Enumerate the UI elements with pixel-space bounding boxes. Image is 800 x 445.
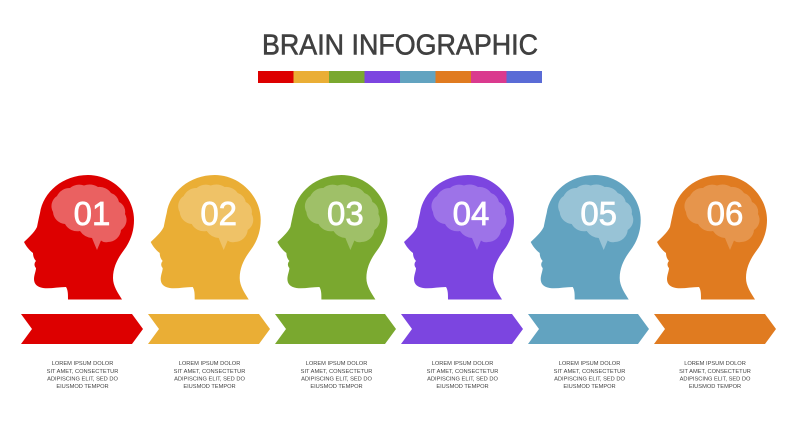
number 02: 02 (200, 195, 237, 232)
panel: step 04 (401, 175, 523, 390)
head icon 02 (151, 175, 261, 300)
arrow 04 (401, 314, 523, 344)
arrow 06 (654, 314, 776, 344)
head icon 01 (24, 175, 134, 300)
text 03: EIUSMOD TEMPOR (310, 384, 363, 390)
arrow 03 (275, 314, 396, 344)
head icon 04 (404, 175, 514, 300)
text 03: SIT AMET, CONSECTETUR (301, 369, 372, 375)
number 05: 05 (580, 195, 617, 232)
text 01: SIT AMET, CONSECTETUR (47, 369, 118, 375)
head icon 03 (277, 175, 387, 300)
text 06: LOREM IPSUM DOLOR (684, 361, 746, 367)
title: BRAIN INFOGRAPHIC (262, 30, 538, 62)
panel: step 02 (148, 175, 270, 390)
number 04: 04 (453, 195, 489, 232)
text 04: SIT AMET, CONSECTETUR (427, 369, 498, 375)
text 06: SIT AMET, CONSECTETUR (679, 369, 751, 375)
panel: step 06 (654, 175, 776, 390)
text 03: ADIPISCING ELIT, SED DO (301, 376, 372, 382)
panel: step 01 (21, 175, 143, 390)
text 02: EIUSMOD TEMPOR (183, 384, 236, 390)
number 01: 01 (74, 195, 110, 232)
text 05: LOREM IPSUM DOLOR (559, 361, 620, 367)
panel: step 05 (528, 175, 649, 390)
text 01: LOREM IPSUM DOLOR (52, 361, 113, 367)
arrow 05 (528, 314, 649, 344)
text 02: ADIPISCING ELIT, SED DO (174, 376, 245, 382)
number 06: 06 (707, 195, 743, 232)
text 05: SIT AMET, CONSECTETUR (554, 369, 625, 375)
text 02: LOREM IPSUM DOLOR (179, 361, 240, 367)
text 04: EIUSMOD TEMPOR (436, 384, 489, 390)
arrow 01 (21, 314, 143, 344)
number 03: 03 (327, 195, 364, 232)
text 05: ADIPISCING ELIT, SED DO (554, 376, 625, 382)
colour strip (258, 71, 542, 83)
arrow 02 (148, 314, 270, 344)
text 06: ADIPISCING ELIT, SED DO (680, 376, 751, 382)
panel: step 03 (275, 175, 396, 390)
text 06: EIUSMOD TEMPOR (689, 384, 741, 390)
text 04: ADIPISCING ELIT, SED DO (427, 376, 498, 382)
text 05: EIUSMOD TEMPOR (563, 384, 616, 390)
head icon 06 (657, 175, 767, 300)
text 04: LOREM IPSUM DOLOR (432, 361, 493, 367)
text 01: ADIPISCING ELIT, SED DO (47, 376, 118, 382)
text 01: EIUSMOD TEMPOR (56, 384, 109, 390)
text 03: LOREM IPSUM DOLOR (306, 361, 367, 367)
head icon 05 (531, 175, 641, 300)
text 02: SIT AMET, CONSECTETUR (174, 369, 245, 375)
